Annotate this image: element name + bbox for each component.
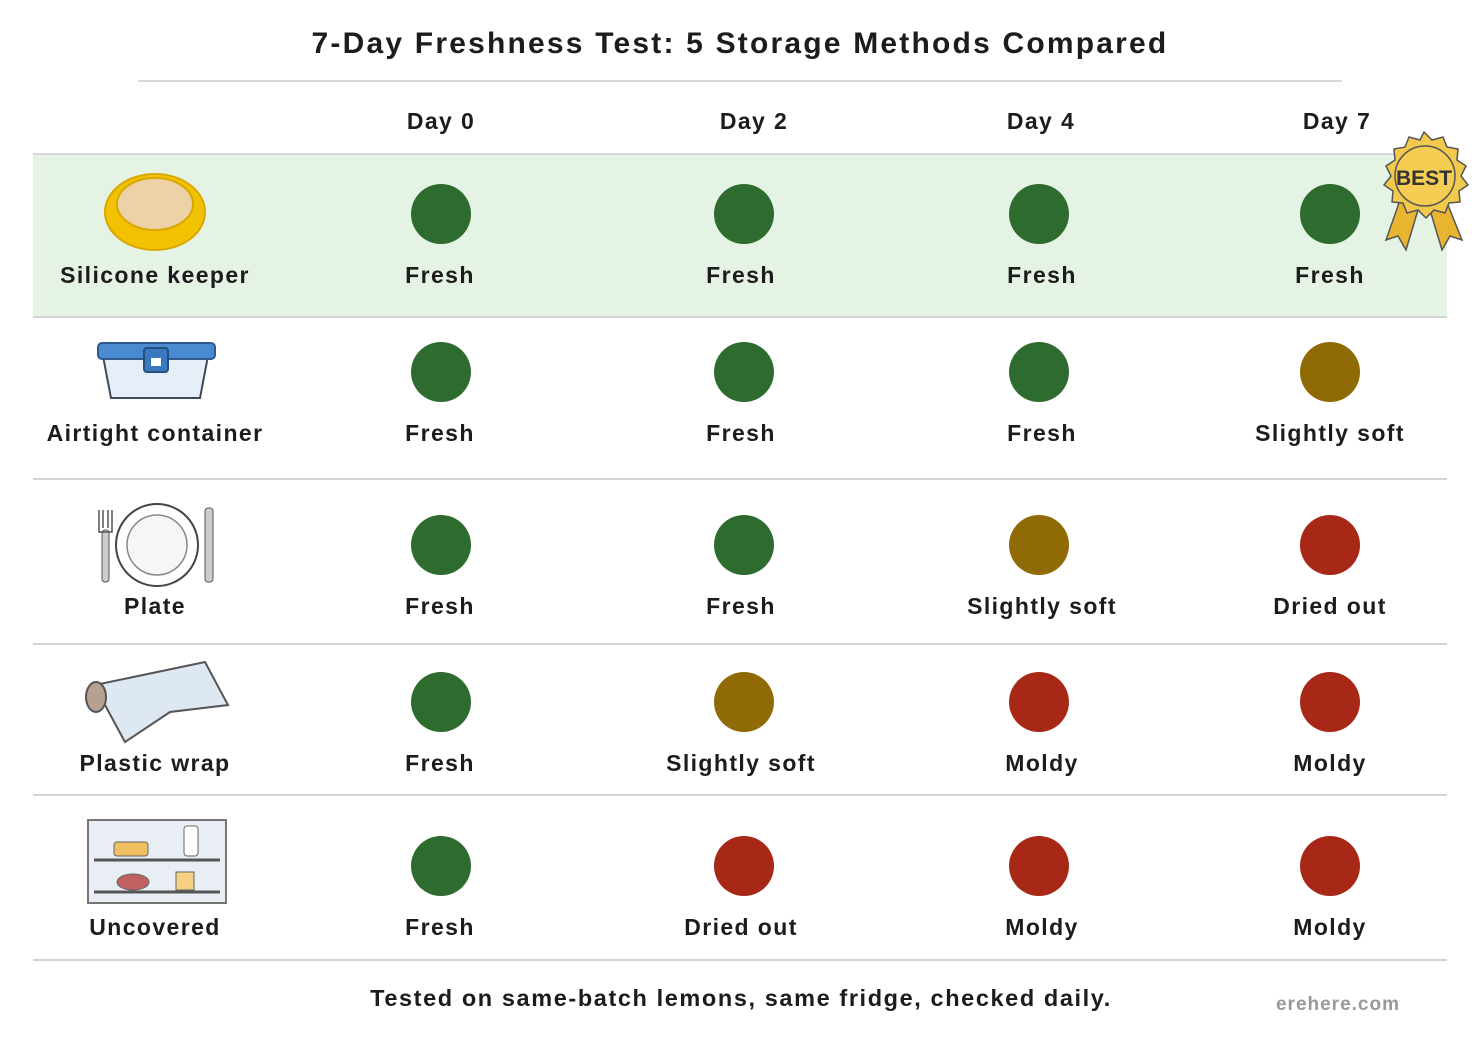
status labels: Fresh	[405, 420, 475, 446]
highlighted row background	[33, 155, 1447, 317]
row labels: Plastic wrap	[79, 750, 231, 776]
row labels: Silicone keeper	[60, 262, 250, 288]
row labels: Plate	[124, 593, 186, 619]
row labels	[47, 262, 263, 940]
status labels: Fresh	[405, 262, 475, 288]
title: 7-Day Freshness Test: 5 Storage Methods Compared	[312, 27, 1168, 60]
status labels: Moldy	[1293, 750, 1367, 776]
status labels: Fresh	[1007, 262, 1077, 288]
column headers	[407, 108, 1371, 134]
column headers: Day 0	[407, 108, 475, 134]
icon: best badge: BEST	[1396, 167, 1452, 190]
status labels: Moldy	[1293, 914, 1367, 940]
status circles	[411, 184, 1360, 896]
status labels: Dried out	[1273, 593, 1387, 619]
status labels: Fresh	[405, 750, 475, 776]
status labels	[405, 262, 1405, 940]
icon: best badge	[1384, 132, 1468, 250]
status labels: Dried out	[684, 914, 798, 940]
status labels: Fresh	[706, 420, 776, 446]
status labels: Fresh	[706, 593, 776, 619]
footnote: Tested on same-batch lemons, same fridge, checked daily.	[370, 985, 1112, 1011]
column headers: Day 4	[1007, 108, 1075, 134]
status labels: Fresh	[706, 262, 776, 288]
icon: airtight container	[98, 343, 215, 398]
status labels: Moldy	[1005, 914, 1079, 940]
column headers: Day 2	[720, 108, 788, 134]
row labels: Uncovered	[89, 914, 221, 940]
column headers: Day 7	[1303, 108, 1371, 134]
status labels: Slightly soft	[1255, 420, 1405, 446]
icon: plastic wrap	[86, 662, 228, 742]
status labels: Slightly soft	[666, 750, 816, 776]
status labels: Fresh	[405, 914, 475, 940]
source credit: erehere.com	[1276, 994, 1400, 1015]
icon: fridge	[88, 820, 226, 903]
icon: plate	[99, 504, 213, 586]
status labels: Fresh	[405, 593, 475, 619]
status labels: Moldy	[1005, 750, 1079, 776]
status labels: Fresh	[1295, 262, 1365, 288]
status labels: Fresh	[1007, 420, 1077, 446]
status labels: Slightly soft	[967, 593, 1117, 619]
icon: silicone keeper	[105, 174, 205, 250]
row labels: Airtight container	[47, 420, 263, 446]
